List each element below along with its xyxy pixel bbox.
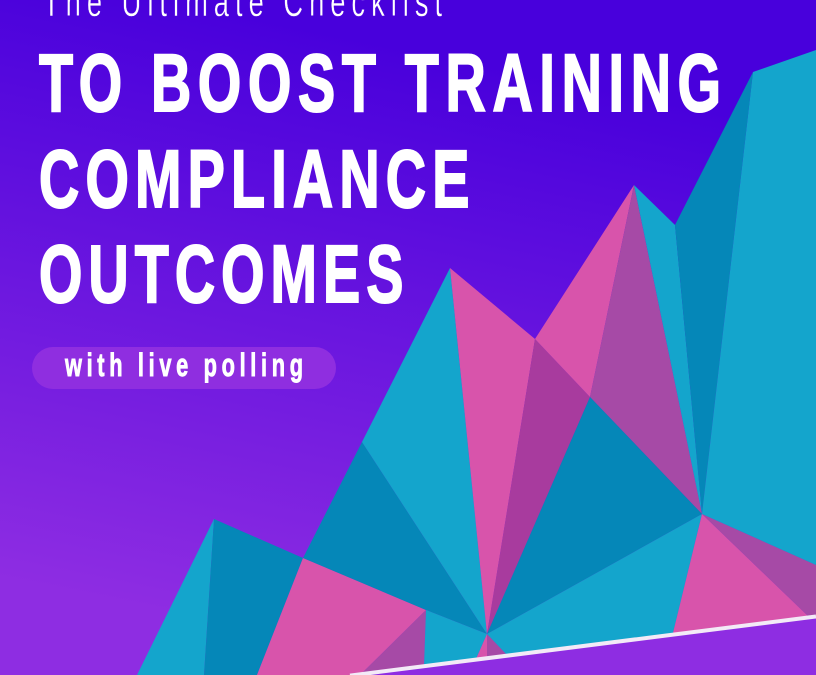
title line 1: TO BOOST TRAINING [39,37,721,129]
ground fill below line [355,616,816,675]
pill background [32,347,336,389]
white ground line [350,616,816,675]
low-poly mountain chart [137,50,816,675]
title line 2: COMPLIANCE [39,133,469,225]
pill text: with live polling [64,347,303,383]
subtitle pill [32,347,336,389]
title line 3: OUTCOMES [39,228,403,320]
title [39,37,721,320]
left peak [137,519,426,675]
middle peak [303,268,590,666]
right peaks [487,50,816,655]
